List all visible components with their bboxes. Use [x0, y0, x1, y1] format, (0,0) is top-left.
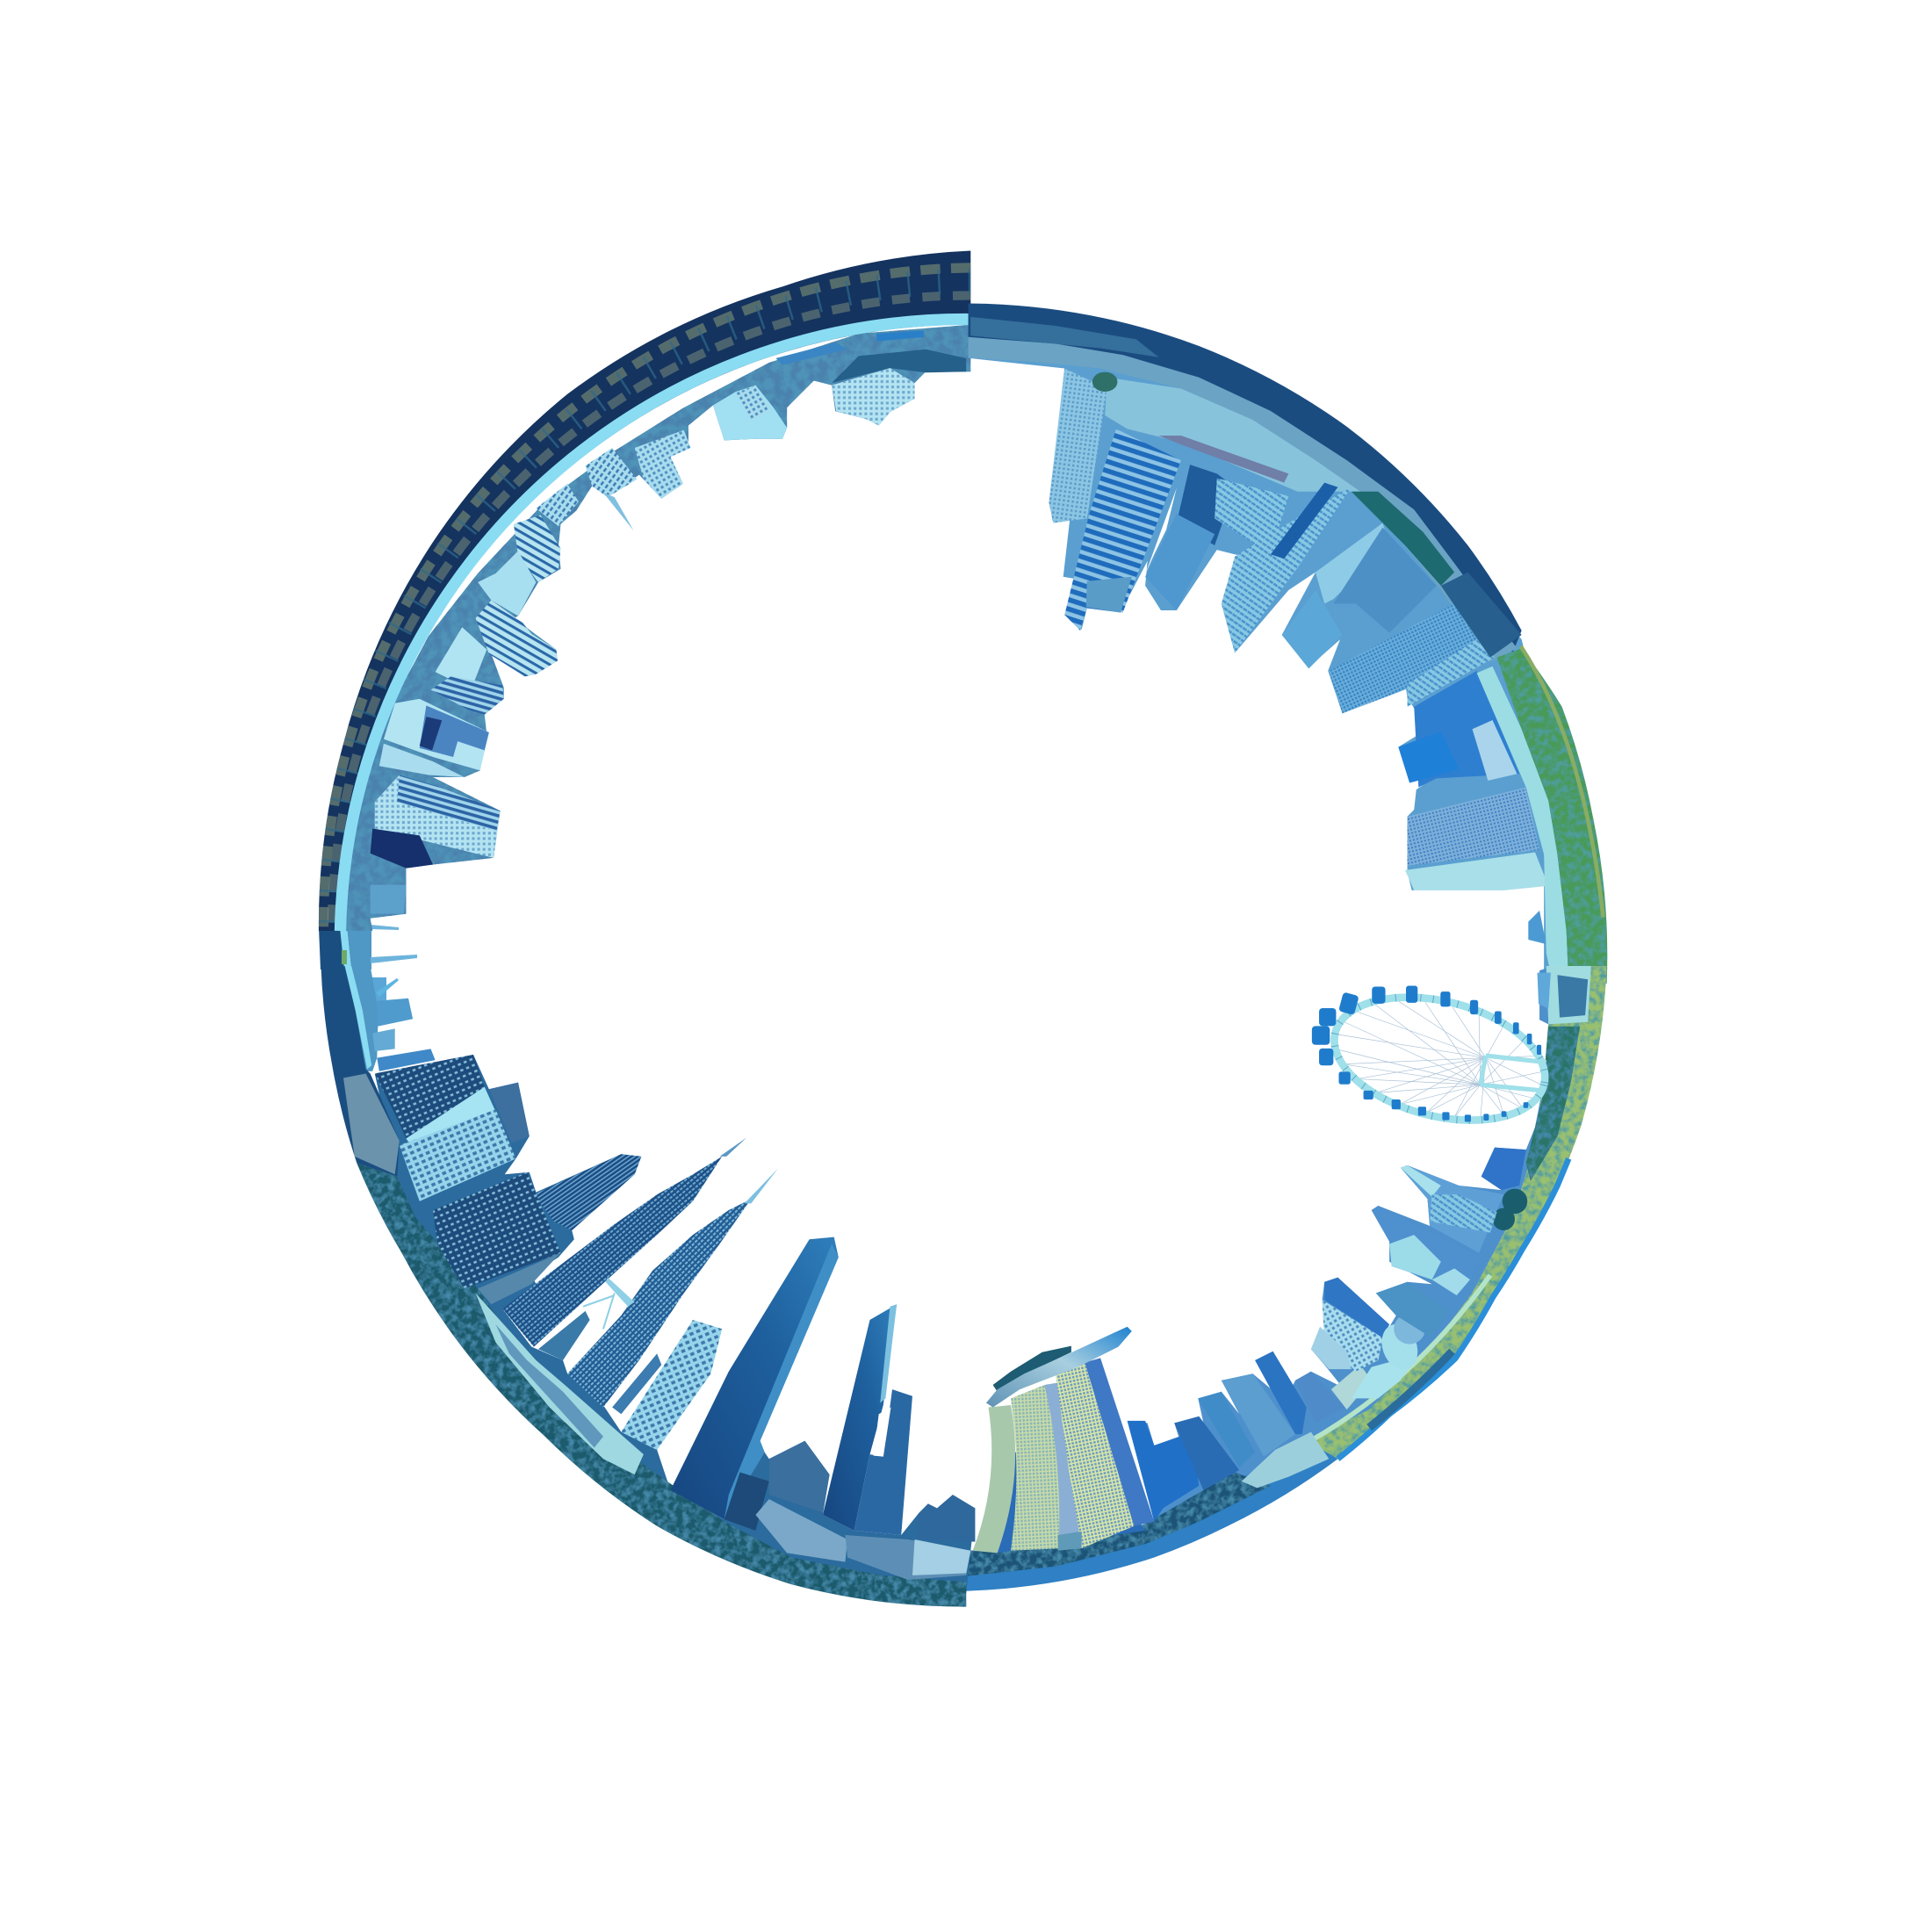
dark block top	[534, 1154, 641, 1230]
building: slim light tower	[1049, 368, 1107, 523]
tall block dark top	[375, 1055, 485, 1138]
building: M upper dark	[397, 775, 501, 831]
building: left glass	[1282, 590, 1343, 668]
artscience petal 3	[1394, 1314, 1425, 1344]
building: O	[371, 884, 406, 914]
tower cluster A	[1372, 1206, 1481, 1295]
building: curved glass	[1333, 528, 1437, 633]
hotel podium small	[1058, 1532, 1082, 1551]
ferris wheel	[1312, 977, 1558, 1141]
building: glass tall	[1198, 1392, 1255, 1467]
wheel spokes	[1335, 1001, 1544, 1119]
building mass silhouette	[341, 325, 970, 931]
blue rim	[1337, 1158, 1568, 1459]
hotel tower 2	[1011, 1385, 1059, 1551]
building: pale stepped	[1316, 523, 1389, 603]
base section	[347, 927, 371, 970]
hotel back gap fill	[998, 1414, 1145, 1553]
grey pleated roof	[343, 1073, 400, 1174]
olive band	[1258, 966, 1607, 1499]
spire	[603, 493, 634, 530]
shoreline podium	[476, 1293, 644, 1474]
petronas tower right	[567, 1199, 751, 1408]
grey roof patch	[970, 317, 1158, 357]
low blue tower	[377, 1049, 436, 1071]
tower base	[1086, 577, 1132, 613]
low pale building	[478, 1253, 560, 1304]
building: dark slot	[1271, 483, 1337, 559]
building: G	[478, 551, 536, 616]
marina bay sands hotel	[973, 1327, 1154, 1553]
outer ring band: dark terraces	[319, 251, 970, 931]
building: grid blue	[1174, 1417, 1239, 1490]
outer ring band: dark road	[969, 304, 1522, 652]
hotel tower 1	[973, 1405, 1015, 1553]
small tower between	[538, 1311, 590, 1360]
building: ribbed	[1215, 478, 1288, 554]
trees near road	[1352, 492, 1454, 586]
tower cluster A pale	[1389, 1235, 1441, 1280]
building: lower block E	[536, 484, 579, 526]
building mass silhouette	[1128, 966, 1553, 1522]
quadrant: upper-right skyline	[969, 304, 1607, 984]
building: wide tile	[1329, 603, 1490, 713]
building: curved glass	[1222, 1373, 1295, 1457]
crane arm	[376, 978, 399, 997]
podium inset	[495, 1324, 603, 1447]
green trees right	[1526, 1027, 1580, 1181]
quadrant: lower-left skyline	[321, 966, 975, 1607]
building: glass	[1145, 514, 1215, 610]
dark podium	[724, 1473, 769, 1531]
low podium	[755, 1499, 847, 1562]
blue blocks behind hotel	[1128, 1421, 1199, 1522]
road section	[340, 927, 351, 970]
upper left dark band	[321, 966, 400, 1177]
pale gateway	[1331, 1365, 1372, 1409]
building: M lower	[375, 775, 501, 858]
small towers at top	[377, 998, 413, 1027]
wheel rim	[1322, 977, 1558, 1141]
white gap between towers	[1145, 488, 1177, 574]
tree line along promenade	[966, 1473, 1271, 1576]
tower cluster B	[1401, 1165, 1503, 1253]
pale railing stripe	[1307, 1275, 1490, 1443]
cluster grid	[1473, 720, 1517, 781]
green patch	[342, 950, 347, 964]
sky park trees	[993, 1346, 1071, 1392]
left spire	[720, 1137, 746, 1157]
capsules	[1312, 985, 1541, 1122]
building: mid dark	[1177, 465, 1235, 545]
pale road	[345, 966, 371, 1069]
lattice tower	[612, 1353, 661, 1414]
artscience petal 2	[1376, 1319, 1424, 1374]
building: I	[436, 627, 487, 690]
hotel tower 2 right slab	[1044, 1382, 1080, 1548]
cluster left block	[1398, 732, 1459, 782]
right low podium	[845, 1535, 970, 1580]
complex red roof line	[1158, 436, 1288, 483]
curved roof canopy	[1242, 1432, 1329, 1488]
building: block behind	[1295, 1372, 1344, 1423]
olive rim	[1521, 646, 1604, 917]
vehicle strip 2	[775, 342, 847, 365]
building: K	[384, 699, 489, 770]
support legs	[1481, 1056, 1546, 1091]
antenna mast 1	[371, 925, 399, 930]
sky gap	[874, 1408, 890, 1457]
skybridge	[605, 1278, 635, 1307]
roadside node	[1441, 573, 1522, 658]
right spire	[745, 1169, 778, 1203]
sign panel	[420, 717, 442, 750]
small towers right	[917, 1495, 975, 1542]
tree cluster	[1503, 1189, 1527, 1214]
base strip	[346, 966, 378, 1071]
building: spire block	[586, 448, 637, 497]
tower cluster B stripes	[1430, 1194, 1497, 1233]
building: J	[431, 676, 504, 715]
mid block cluster	[1376, 1282, 1447, 1337]
pale structure top-right	[1546, 966, 1591, 1024]
building: striped F	[514, 515, 560, 582]
terrace rows	[324, 268, 970, 931]
building: wide hotel	[1408, 788, 1539, 866]
building mass silhouette	[969, 349, 1571, 984]
building: dark teal tower	[1255, 1352, 1307, 1434]
block front grid	[433, 1172, 560, 1288]
building: N navy sign	[371, 829, 433, 869]
tower right highlight	[880, 1304, 897, 1402]
dark gantry	[1557, 975, 1588, 1018]
building: sloped tower	[1324, 1278, 1389, 1337]
building: stepped block	[635, 430, 690, 499]
small pale tower	[1311, 1327, 1352, 1369]
twin tower main	[823, 1304, 897, 1531]
quadrant: upper-left skyline	[319, 251, 970, 931]
hotel tower 3	[1056, 1363, 1134, 1548]
forest band	[357, 1163, 966, 1607]
blue road vehicles	[876, 330, 924, 342]
dark band section	[319, 927, 345, 970]
green forest band	[1497, 648, 1607, 984]
building: K blue facade	[420, 705, 489, 757]
bridge strut	[583, 1293, 615, 1329]
building mass silhouette	[357, 1055, 975, 1593]
trees near top	[832, 350, 966, 383]
strip: pale roadside	[1477, 667, 1568, 984]
side tower	[489, 1083, 530, 1143]
tall glass tower	[670, 1237, 839, 1519]
petronas tower left	[502, 1157, 722, 1347]
dark road crossing	[1369, 1352, 1453, 1428]
building: colonial complex	[1105, 378, 1360, 492]
building: angled light	[1222, 487, 1352, 652]
left seam: ring section between upper and lower skyline	[319, 925, 417, 1004]
sky park deck	[986, 1327, 1132, 1408]
hotel tower 3 side	[1085, 1358, 1154, 1526]
circular city skyline illustration	[318, 251, 1607, 1607]
small tower	[372, 977, 386, 1004]
building: civic block windows	[735, 386, 771, 421]
building: L	[379, 744, 465, 777]
twin tower right	[854, 1389, 912, 1535]
tower cluster A light lower	[1432, 1268, 1470, 1295]
blue cube	[1481, 1148, 1526, 1190]
mid cluster	[769, 1441, 830, 1512]
block tower	[621, 1320, 722, 1450]
antenna mast 2	[371, 955, 417, 963]
small tower 2	[372, 1028, 395, 1051]
tall block pale	[406, 1087, 495, 1145]
quadrant: lower-right skyline	[966, 966, 1607, 1591]
tower cluster B pale front	[1401, 1165, 1441, 1197]
hotel podium	[1405, 853, 1548, 890]
tall block grid	[400, 1109, 515, 1201]
building: civic block	[713, 386, 787, 440]
small blue building	[1528, 911, 1546, 944]
lower water band	[966, 1441, 1337, 1591]
building: pale-striped tower	[1323, 1300, 1382, 1372]
building: striped tower	[1064, 429, 1181, 631]
tree on complex	[1092, 372, 1117, 392]
building: blue cluster	[1414, 671, 1519, 788]
tree cluster 2	[1492, 1208, 1515, 1230]
tall glass highlight	[724, 1244, 839, 1519]
building: striped H	[476, 600, 558, 676]
pale low front	[912, 1539, 970, 1575]
lighter inner road band	[969, 337, 1517, 662]
building: hotel top	[832, 368, 915, 425]
building: stripe block	[1408, 639, 1495, 707]
blue block at top	[1538, 973, 1551, 1008]
truss marks	[1322, 977, 1558, 1141]
artscience petals	[1352, 1356, 1417, 1398]
light ring road	[340, 320, 970, 931]
